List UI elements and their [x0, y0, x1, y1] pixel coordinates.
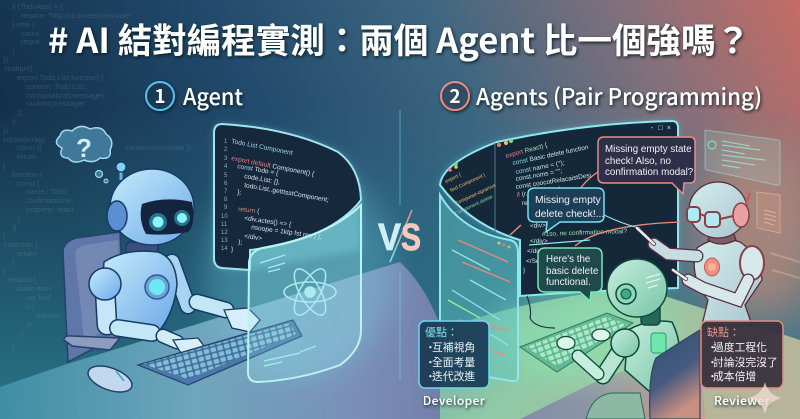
doc panel [757, 192, 780, 233]
background code text: )| [12, 223, 16, 232]
thought bubble [56, 126, 112, 183]
panel: right large code screen [440, 121, 678, 296]
icon: sparkle [748, 382, 782, 414]
torso [103, 251, 177, 330]
background code text: colotnSerag( [3, 135, 45, 144]
code text: if (r.noseup) = ( [516, 186, 562, 199]
robot: developer [557, 259, 700, 419]
panel: pros: 全面考量 [432, 354, 475, 370]
background code text: count [21, 29, 39, 38]
background code text: }); [17, 108, 24, 117]
code text: </div> [530, 238, 548, 245]
panel: right large code screen: find Component | [449, 172, 486, 194]
callout: basic delete: functional. [546, 277, 591, 288]
panel: pros: · [425, 354, 436, 370]
vs mark: S [401, 217, 421, 259]
code lines: 10 [221, 214, 228, 220]
code text: const name = (''); [515, 160, 565, 176]
panel: right glass screen [440, 195, 518, 381]
code lines [221, 138, 329, 253]
background code text: } else { [12, 20, 35, 29]
background code text: name:: Todo, [26, 187, 69, 196]
shoulder [740, 246, 764, 280]
right hand [224, 308, 260, 332]
background code text: const { [17, 179, 40, 188]
code lines: 7 [224, 189, 228, 195]
code lines: 5 [224, 173, 228, 179]
background code text: ) [21, 329, 23, 338]
title: # AI 結對編程實測：兩個 Agent 比一個強嗎？ [48, 13, 750, 63]
robot: single agent [89, 162, 260, 355]
panel: pros: 互補視角 [432, 339, 475, 355]
panel: cons: · [707, 368, 718, 384]
heading: 1 Agent: 1 [154, 82, 166, 109]
panel: right large code screen: - □ × [650, 125, 671, 133]
code lines [448, 240, 510, 355]
code text: #1so, ne confirmation mooal? [542, 228, 628, 238]
panel: pros: 優點： [425, 324, 458, 340]
code text [505, 142, 628, 274]
code lines: 13 [221, 238, 228, 244]
neck [641, 303, 660, 325]
background code text: raviktnt(messager [26, 99, 85, 108]
right side floor [400, 340, 800, 419]
panel: cons: 缺點： [707, 324, 740, 340]
code lines: } [231, 246, 234, 253]
background code text: /> [26, 320, 32, 329]
callout: missing empty state: Missing empty state [605, 144, 692, 155]
code lines: export default Component() { [231, 155, 316, 178]
code lines: return ( [238, 206, 260, 215]
callout: basic delete: basic delete [546, 266, 599, 277]
code lines: Todo List Component [231, 138, 293, 157]
head [689, 182, 747, 238]
panel: right large code screen: export { [444, 172, 463, 185]
code text: } [523, 267, 526, 274]
background code text: } [3, 161, 6, 170]
code lines: 1 [224, 139, 228, 145]
ear [616, 284, 636, 304]
callout: missing empty state: check! Also, no [605, 156, 671, 167]
robot: reviewer [637, 182, 764, 325]
label: reviewer: Reviewer [714, 392, 770, 409]
panel: cons: · [707, 339, 718, 355]
right desk [440, 288, 800, 419]
left hand [173, 338, 204, 355]
code text: const Basic delete function [512, 144, 589, 167]
chest light [145, 275, 169, 299]
panel: right large code screen: Componet-ogramus [454, 182, 497, 207]
code text: </Se> [526, 258, 544, 265]
lower arm [673, 270, 748, 300]
connector curves [510, 166, 680, 328]
panel: cons: · [707, 354, 718, 370]
panel: cons: 過度工程化 [713, 339, 767, 355]
panel: pros: · [425, 339, 436, 355]
background code text: }; [17, 214, 22, 223]
icon: react atom [284, 264, 336, 320]
chair [650, 330, 700, 419]
background code text: export Todo List function) { [17, 73, 104, 82]
code lines: 6 [224, 181, 228, 187]
glasses [687, 207, 733, 227]
arm [578, 350, 620, 376]
code lines: 12 [221, 230, 228, 236]
code text: const.noms = ""; [515, 168, 563, 183]
raised arm [637, 228, 697, 256]
keyboard: right [520, 313, 633, 372]
background code text: canoe/coooonmat }); [125, 143, 193, 152]
label: developer: Developer [423, 392, 485, 409]
background code text: return [17, 249, 36, 258]
glow: left screen [205, 160, 395, 380]
code lines: ); [238, 239, 243, 246]
window buttons [448, 139, 513, 172]
code lines: <div.actes() => { [244, 215, 292, 229]
background code text: require: "http://ai.coree/csow.vole" [21, 11, 133, 20]
panel: left glass screen [248, 205, 361, 382]
ear [733, 203, 749, 227]
code lines: 14 [221, 246, 228, 252]
callout: missing delete check: delete check!... [535, 209, 604, 220]
background code text: function { [12, 170, 43, 179]
code lines: 2 [224, 147, 228, 153]
heading: 1 Agent [146, 78, 243, 112]
vs mark: V [378, 217, 402, 259]
ear [107, 201, 127, 231]
code lines: nsoope = 1ktp fst res } }; [251, 224, 322, 241]
chair: left robot [63, 232, 125, 362]
background code text: }) [3, 126, 8, 135]
background code text: } [3, 267, 6, 276]
background code text: static-mon [17, 284, 51, 293]
vs divider [399, 110, 401, 380]
eyes [149, 210, 190, 231]
shoulder [611, 329, 639, 357]
background code text: return [17, 152, 36, 161]
panel: right large code screen: Component.delete [454, 194, 494, 217]
background code text: } [12, 258, 15, 267]
background code text: .reatign({ [3, 64, 33, 73]
legs [586, 393, 645, 419]
background code text: } [12, 343, 15, 352]
hands [557, 329, 610, 350]
background code text: const (( [17, 143, 42, 152]
small panel: top right [705, 130, 780, 185]
background code text: => [26, 302, 35, 311]
background code text: 1specton { [3, 240, 38, 249]
code lines: const Todo = { [237, 163, 280, 177]
code text: <div> [530, 222, 546, 230]
head [607, 259, 667, 317]
background code text: if (TodoApp) = { [12, 2, 63, 11]
background code text: rasport { [8, 275, 36, 284]
panel: left code screen [214, 124, 361, 270]
code lines: 9 [224, 205, 228, 211]
left desk [0, 262, 445, 419]
background code text: }) [3, 55, 8, 64]
background code text: } [3, 231, 6, 240]
left arm [89, 268, 177, 342]
head [110, 169, 194, 245]
panel: pros: · [425, 368, 436, 384]
panel: cons [701, 321, 783, 388]
background code text: usr fonf [26, 293, 52, 302]
heading: 1 Agent: Agent [183, 78, 243, 112]
code text: export React) { [505, 142, 549, 160]
code lines: code.List: {}, [244, 173, 281, 186]
panel: cons: 成本倍增 [713, 368, 756, 384]
torso [625, 321, 680, 392]
neck [708, 232, 736, 244]
code lines: todo.List..getttsstComponent; [244, 182, 329, 204]
code lines: 4 [224, 164, 228, 170]
panel: pros: 迭代改進 [432, 368, 475, 384]
heading: 2 Agents: Agents (Pair Programming) [476, 78, 762, 112]
background code text: property: react [26, 205, 74, 214]
callout: missing delete check [528, 188, 604, 232]
background code text [3, 2, 193, 352]
background code text: reque [21, 37, 40, 46]
body [694, 239, 762, 325]
code lines: 8 [224, 197, 228, 203]
code text: return [522, 200, 539, 207]
callout: missing empty state [598, 137, 695, 194]
callout: missing empty state: confirmation modal? [605, 167, 694, 178]
code lines: 3 [224, 156, 228, 162]
callout: basic delete [538, 248, 602, 301]
callout: missing delete check: Missing empty [535, 195, 602, 206]
vs mark [378, 210, 421, 262]
mouse [85, 361, 135, 397]
panel: pros [419, 321, 489, 388]
background code text: contianializat(message) [26, 91, 104, 100]
right arm [172, 262, 226, 310]
code text: const coocotRelacaistDesi [515, 172, 592, 191]
antenna [743, 193, 750, 212]
background code text: }; [12, 117, 17, 126]
neck [126, 242, 158, 258]
green glow [490, 290, 680, 380]
code lines: }; [237, 189, 242, 197]
background code text: confirnantore!, [26, 196, 73, 205]
background code text: content: Todo List', [26, 82, 87, 91]
keyboard: left [138, 320, 302, 385]
heading: 2 Agents: 2 [449, 82, 461, 109]
callout: basic delete: Here's the [546, 254, 591, 265]
antenna [116, 162, 126, 180]
background code text: zuoses; [35, 311, 60, 320]
streak lines [770, 253, 800, 278]
panel: cons: 討論沒完沒了 [713, 354, 778, 370]
chest light [704, 258, 720, 276]
code lines: 11 [221, 222, 228, 228]
body screen [651, 333, 666, 353]
code text: </div> [527, 248, 545, 255]
code lines: </div> [244, 233, 263, 243]
thought bubble: ? [76, 133, 92, 163]
background code text: } [12, 46, 15, 55]
visor [141, 199, 193, 235]
